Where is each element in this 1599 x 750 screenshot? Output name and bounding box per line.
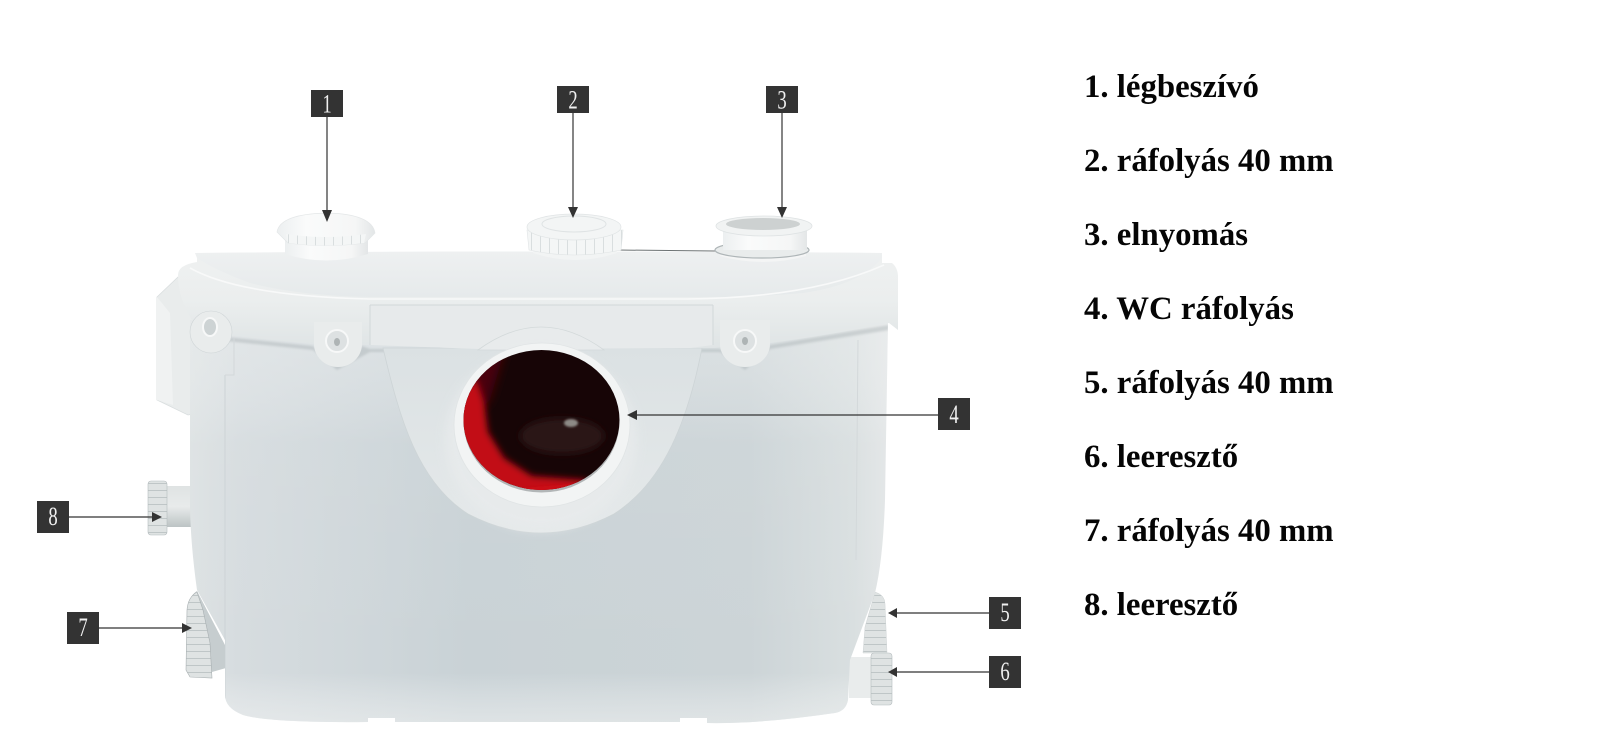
outlet 3 — [715, 216, 812, 262]
callout 5: 5 — [1000, 598, 1010, 627]
callout 2 — [557, 86, 589, 218]
callout 2: 2 — [568, 86, 578, 114]
cap 2 — [527, 214, 623, 260]
screw ear center-left — [314, 322, 362, 367]
legend item 8: 8. leeresztő — [1084, 587, 1238, 623]
inlet ring — [454, 343, 630, 507]
side fitting 6 — [849, 653, 892, 705]
callout 8 — [37, 501, 162, 533]
inlet arch — [478, 327, 604, 350]
side fitting 8 — [148, 481, 194, 535]
callout 3 — [766, 86, 798, 218]
callout 3: 3 — [777, 86, 787, 114]
lid highlight — [190, 265, 884, 299]
side box on left — [157, 277, 199, 416]
legend item 5: 5. ráfolyás 40 mm — [1084, 365, 1334, 401]
callout 1 — [311, 90, 343, 222]
legend item 1: 1. légbeszívó — [1084, 69, 1259, 105]
callout 1: 1 — [322, 90, 332, 118]
u-shaped inlet flange — [383, 348, 702, 533]
side fitting 5 — [863, 592, 887, 653]
callout 6 — [888, 656, 1021, 688]
legend list — [1084, 69, 1334, 623]
pump unit — [148, 213, 900, 730]
side fitting 7 — [186, 591, 226, 678]
lid top edge line — [617, 250, 715, 251]
callout 8: 8 — [48, 502, 58, 531]
inlet halo — [445, 350, 637, 530]
legend item 6: 6. leeresztő — [1084, 439, 1238, 475]
callout 7: 7 — [78, 613, 88, 642]
callout 7 — [67, 612, 192, 644]
screw ear right — [720, 320, 770, 367]
callout 6: 6 — [1000, 657, 1010, 686]
cap 1 — [277, 213, 375, 260]
screw ear left — [190, 311, 232, 353]
legend item 7: 7. ráfolyás 40 mm — [1084, 513, 1334, 549]
callout 4 — [627, 398, 970, 430]
legend item 2: 2. ráfolyás 40 mm — [1084, 143, 1334, 179]
inlet hole — [464, 350, 620, 492]
lid top surface — [195, 252, 882, 297]
body shading — [180, 320, 900, 730]
tank body — [190, 320, 888, 723]
legend item 4: 4. WC ráfolyás — [1084, 291, 1294, 327]
lid band — [178, 252, 898, 349]
center band — [370, 305, 713, 349]
callout 4: 4 — [949, 400, 959, 429]
callout 5 — [888, 597, 1021, 629]
legend item 3: 3. elnyomás — [1084, 217, 1248, 253]
